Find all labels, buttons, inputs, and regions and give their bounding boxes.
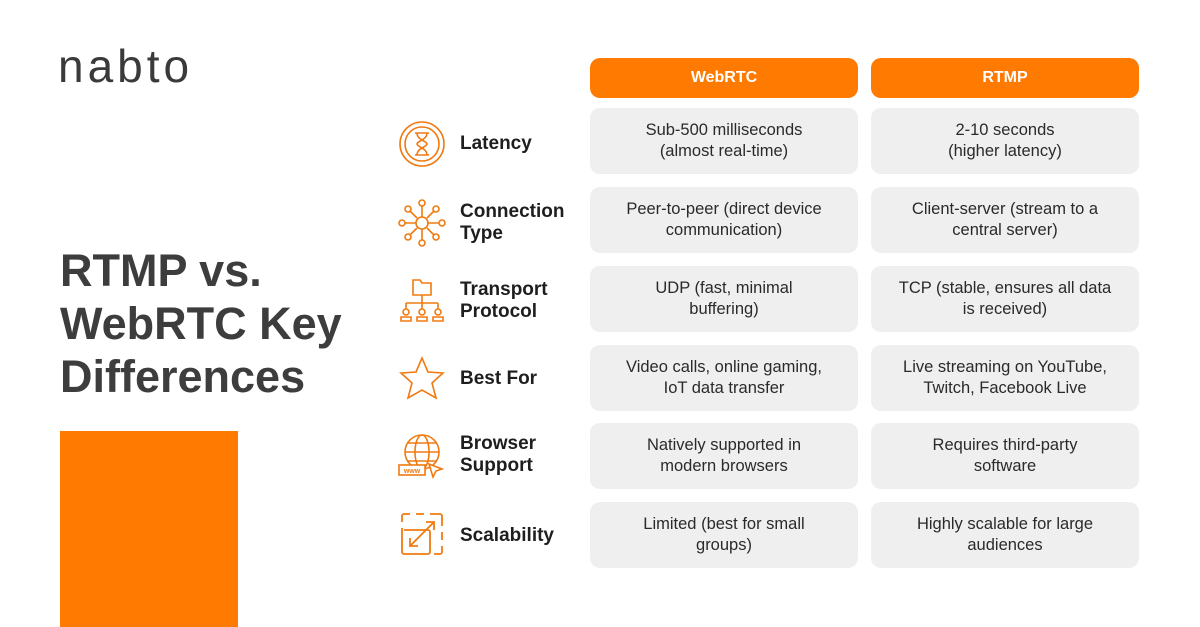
label: transport protocol: Protocol [460, 301, 537, 322]
text: Client-server (stream to a [912, 200, 1098, 218]
row cells: (almost real-time) [660, 142, 788, 160]
header: RTMP [871, 58, 1139, 98]
header: RTMP: RTMP [982, 69, 1028, 86]
text: Natively supported in [647, 436, 801, 454]
text: Video calls, online gaming, [626, 358, 822, 376]
label: scalability: Scalability [460, 525, 554, 546]
label: best for: Best For [460, 368, 537, 389]
text: TCP (stable, ensures all data [899, 279, 1111, 297]
text: Limited (best for small [643, 515, 805, 533]
icon: connection [398, 199, 446, 247]
label: browser support [460, 433, 536, 476]
text: Highly scalable for large [917, 515, 1093, 533]
title: Differences [60, 351, 305, 402]
logo: nabto [58, 40, 193, 92]
icon: browser: www [403, 468, 421, 475]
text: Peer-to-peer (direct device [626, 200, 822, 218]
label: connection type [460, 201, 564, 244]
label: browser support: Browser [460, 433, 536, 454]
text: UDP (fast, minimal [655, 279, 793, 297]
icon: transport [400, 279, 444, 322]
text: is received) [963, 300, 1047, 318]
header: WebRTC [590, 58, 858, 98]
row cells [590, 108, 858, 174]
text: modern browsers [660, 457, 788, 475]
icon: star [399, 356, 445, 400]
label: latency: Latency [460, 133, 532, 154]
text: groups) [696, 536, 752, 554]
icon: latency [399, 121, 445, 167]
text: software [974, 457, 1036, 475]
title: RTMP vs. [60, 245, 262, 296]
text: (higher latency) [948, 142, 1062, 160]
icon: browser [398, 434, 444, 479]
text: Requires third-party [933, 436, 1077, 454]
label: transport protocol [460, 279, 548, 322]
text: IoT data transfer [664, 379, 784, 397]
text: audiences [967, 536, 1043, 554]
label: transport protocol: Transport [460, 279, 548, 300]
label: connection type: Type [460, 223, 503, 244]
header: WebRTC: WebRTC [691, 69, 757, 86]
title: WebRTC Key [60, 298, 342, 349]
label: browser support: Support [460, 455, 533, 476]
text: buffering) [689, 300, 759, 318]
text: central server) [952, 221, 1058, 239]
title [60, 245, 342, 402]
text: 2-10 seconds [955, 121, 1055, 139]
icon: scalability [401, 513, 443, 555]
label: connection type: Connection [460, 201, 564, 222]
row cells: Sub-500 milliseconds [646, 121, 802, 139]
text: communication) [666, 221, 782, 239]
orange block [60, 431, 238, 627]
text: Live streaming on YouTube, [903, 358, 1107, 376]
text: Twitch, Facebook Live [923, 379, 1087, 397]
